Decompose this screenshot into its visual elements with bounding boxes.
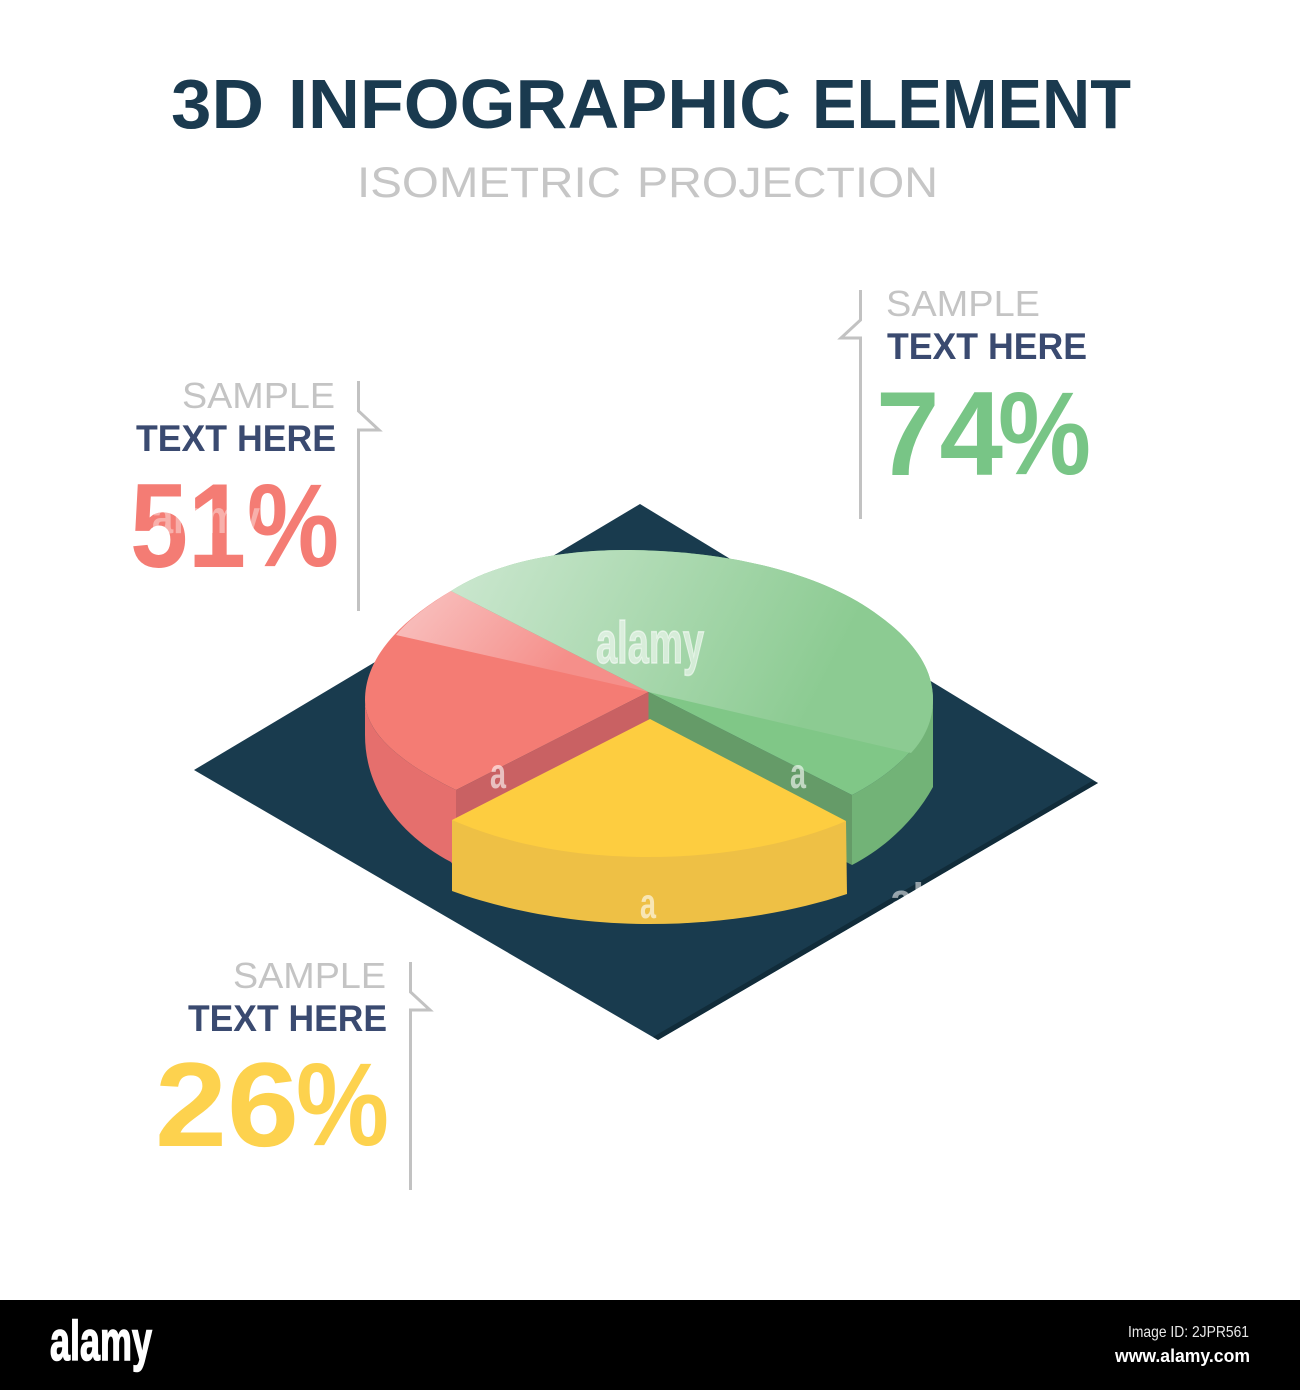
- callout: 74% green: SAMPLE: [886, 283, 1040, 324]
- callout: 74% green: %: [998, 368, 1091, 500]
- yellow slice: [452, 719, 847, 924]
- subtitle: ISOMETRIC: [357, 159, 621, 207]
- 3D pie chart: [365, 550, 933, 924]
- footer logo: alamy: [50, 1309, 152, 1372]
- isometric base plate: [194, 504, 1098, 1040]
- watermark overlay: a: [640, 880, 657, 928]
- callout: 74% green: 74: [876, 367, 1003, 501]
- callout: 26% yellow: %: [296, 1039, 389, 1171]
- red slice: [365, 591, 648, 870]
- callout: 74% green: [841, 283, 1091, 519]
- callout: 51% red: 51: [130, 459, 246, 593]
- watermark overlay: alamy: [152, 491, 260, 543]
- title: 3D: [171, 65, 264, 143]
- callout: 51% red: %: [247, 460, 339, 592]
- callout: 26% yellow: 26: [155, 1038, 299, 1172]
- callout: 26% yellow: TEXT HERE: [188, 998, 387, 1039]
- title: ELEMENT: [812, 65, 1131, 143]
- callout: 51% red: SAMPLE: [182, 375, 335, 416]
- callout: 26% yellow: [155, 955, 430, 1190]
- callout: 51% red: [130, 375, 379, 611]
- watermark overlay: a: [790, 750, 807, 798]
- watermark overlay: alamy: [596, 610, 704, 676]
- image id: Image ID: 2JPR561: [1128, 1324, 1249, 1341]
- watermark overlay: [152, 491, 924, 928]
- title: [171, 65, 1131, 143]
- subtitle: [357, 159, 938, 207]
- watermark overlay: al: [890, 874, 924, 925]
- green slice: [451, 550, 933, 865]
- callout: 51% red: TEXT HERE: [136, 418, 336, 459]
- title: INFOGRAPHIC: [288, 65, 791, 143]
- callout: 26% yellow: SAMPLE: [233, 955, 386, 996]
- watermark overlay: a: [490, 750, 507, 798]
- website: www.alamy.com: [1114, 1346, 1250, 1366]
- footer bar: [0, 1300, 1300, 1390]
- callout: 74% green: TEXT HERE: [887, 326, 1087, 367]
- subtitle: PROJECTION: [637, 159, 938, 207]
